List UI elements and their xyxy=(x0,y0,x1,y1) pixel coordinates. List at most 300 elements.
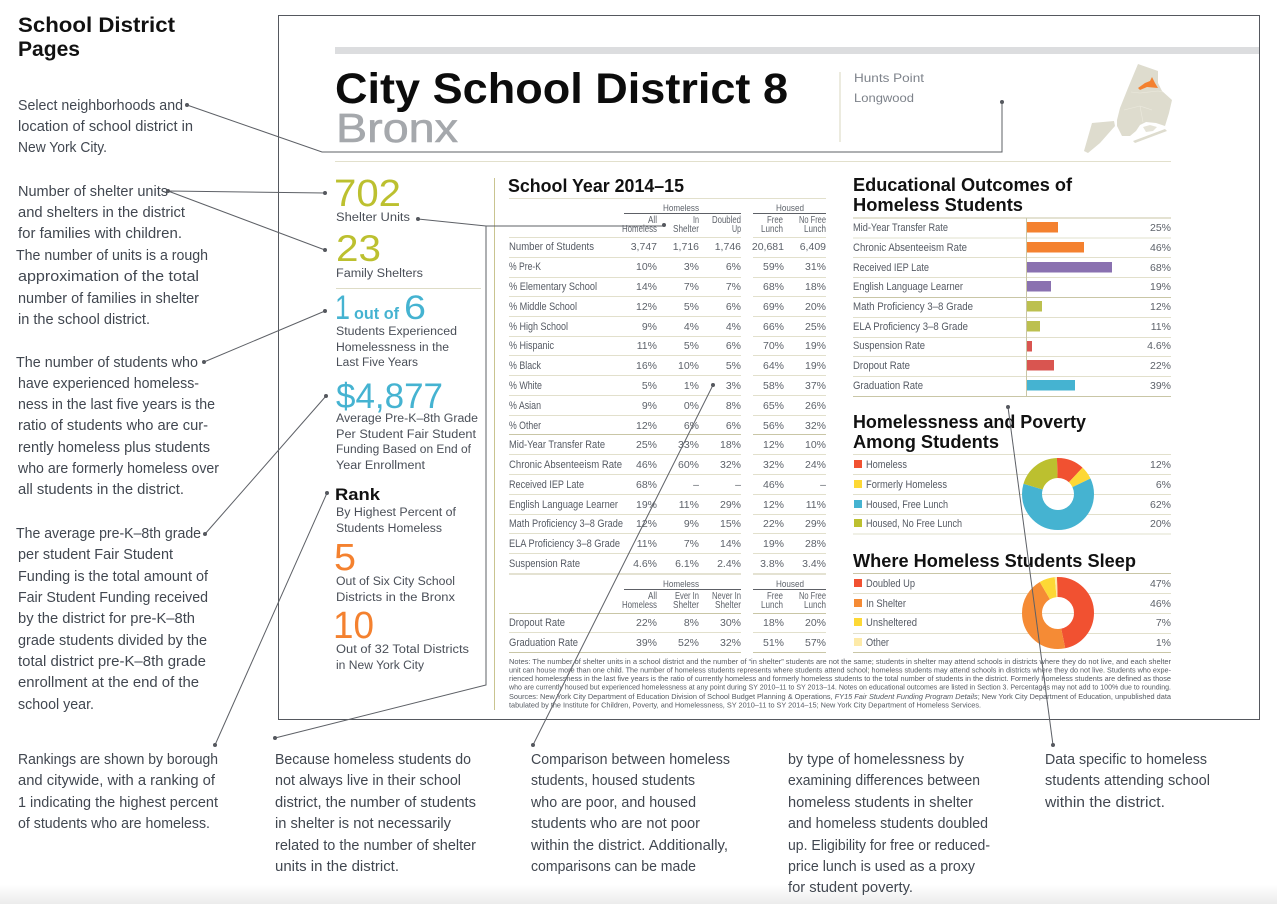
leader: one out of six xyxy=(202,309,327,364)
row: black: 5% xyxy=(726,360,741,372)
annotation: neighborhoods xyxy=(18,97,193,156)
chart: educational outcomes xyxy=(853,175,1171,396)
annotation: shelter units: The number of units is a rough xyxy=(16,247,208,264)
row: middle school: 69% xyxy=(763,301,784,313)
annotation: comparison xyxy=(530,751,730,875)
row: ela proficiency: 11% xyxy=(637,538,657,550)
row: math proficiency xyxy=(509,518,826,530)
bar: received iep late: Received IEP Late xyxy=(853,262,929,274)
row: graduation rate: 51% xyxy=(763,637,784,649)
annotation: neighborhoods: location of school district in xyxy=(18,118,193,135)
legend: in shelter: In Shelter xyxy=(866,598,906,610)
borough name: Bronx xyxy=(336,105,459,151)
legend: in shelter xyxy=(854,598,1171,610)
annotation: shelter units: Number of shelter units xyxy=(18,183,168,200)
row: received iep late: – xyxy=(735,479,741,491)
row: suspension rate: 2.4% xyxy=(717,558,741,570)
chart: where homeless students sleep xyxy=(853,551,1171,652)
row: other: 6% xyxy=(684,420,699,432)
row: graduation rate: 52% xyxy=(678,637,699,649)
notes and sources xyxy=(508,657,1172,710)
stat: funding per student: Per Student Fair Student xyxy=(336,429,477,441)
second column headers: Never In xyxy=(712,591,741,602)
stat: family shelters: Family Shelters xyxy=(336,268,423,280)
annotation: experienced homelessness: ratio of students who are cur- xyxy=(18,417,208,434)
row: pre-k: 6% xyxy=(726,261,741,273)
chart heading xyxy=(853,412,1086,452)
row: other: 32% xyxy=(805,420,826,432)
legend: doubled up: Doubled Up xyxy=(866,578,915,590)
annotation: type of homelessness: by type of homelessness by xyxy=(788,751,964,768)
row: math proficiency: Math Proficiency 3–8 Grade xyxy=(509,518,623,530)
column headers: Homeless xyxy=(622,224,657,235)
chart: homelessness and poverty xyxy=(853,412,1171,534)
row: elementary school xyxy=(509,281,826,293)
annotation: neighborhoods: Select neighborhoods and xyxy=(18,97,183,114)
annotation: experienced homelessness: who are formerly homeless over xyxy=(17,460,219,477)
row: suspension rate xyxy=(509,558,826,570)
annotation: fair student funding: total district pre-K–8th grade xyxy=(18,653,206,670)
row: chronic absenteeism xyxy=(509,459,826,471)
row: ela proficiency: ELA Proficiency 3–8 Grade xyxy=(509,538,620,550)
row: hispanic: 19% xyxy=(805,340,826,352)
chart heading: Where Homeless Students Sleep xyxy=(853,551,1136,571)
stat: shelter units xyxy=(334,173,410,224)
page heading: Pages xyxy=(18,38,80,61)
bar: english language learner: 19% xyxy=(1150,281,1171,293)
legend: unsheltered xyxy=(854,617,1171,629)
legend: housed no free lunch: 20% xyxy=(1150,518,1171,530)
row: elementary school: 14% xyxy=(636,281,657,293)
leader: rank xyxy=(213,491,329,747)
stat: one out of six: out of xyxy=(354,304,399,323)
annotation: experienced homelessness: all students in the district. xyxy=(18,481,184,498)
annotation: students in shelter: Because homeless students do xyxy=(275,751,471,768)
legend: in shelter: 46% xyxy=(1150,598,1171,610)
legend: housed free lunch: Housed, Free Lunch xyxy=(866,499,948,511)
annotation: fair student funding xyxy=(16,525,209,713)
row: hispanic: 70% xyxy=(763,340,784,352)
notes and sources: tabulated by the Institute for Children, Poverty, and Homelessness, SY 2010–11 to SY 2014–15; New York City Department of Homeless Services. xyxy=(509,700,981,710)
stat: funding per student xyxy=(336,377,478,472)
column headers xyxy=(622,203,826,235)
row: english language learner: 11% xyxy=(806,499,826,511)
row: mid-year transfer: 18% xyxy=(720,439,741,451)
row: high school: % High School xyxy=(509,321,568,333)
annotation: experienced homelessness: The number of students who xyxy=(16,354,198,371)
stat: family shelters: 23 xyxy=(336,228,381,269)
notes and sources: Notes: The number of shelter units in a school district and the number of “in shelter” students are not the same; students in shelter may attend schools in districts where they do not live, and each shelter xyxy=(509,657,1172,666)
second column headers: Ever In xyxy=(675,591,699,602)
row: pre-k: % Pre-K xyxy=(509,261,542,273)
row: hispanic: 6% xyxy=(726,340,741,352)
stat: one out of six: 6 xyxy=(404,289,426,327)
panel: sample district page xyxy=(278,16,1260,720)
row: high school: 4% xyxy=(684,321,699,333)
row: asian: 0% xyxy=(684,400,699,412)
row: white: 37% xyxy=(805,380,826,392)
row: suspension rate: 6.1% xyxy=(675,558,699,570)
leader: district data xyxy=(1006,405,1055,747)
annotation: rankings: 1 indicating the highest percent xyxy=(18,794,219,811)
annotation: type of homelessness: examining differences between xyxy=(788,772,980,789)
chart heading xyxy=(853,175,1073,215)
notes and sources: unit can house more than one child. The number of homeless students represents where students attend school; homeless students may attend schools in districts where they do not live. Students who expe- xyxy=(509,666,1172,674)
row: asian xyxy=(509,400,826,412)
rank: Out of 32 Total Districts xyxy=(336,644,469,656)
annotation: shelter units: and shelters in the district xyxy=(18,204,186,221)
column headers: Free xyxy=(767,215,783,226)
bar: graduation rate: 39% xyxy=(1150,380,1171,392)
row: received iep late: Received IEP Late xyxy=(509,479,584,491)
annotation: neighborhoods: New York City. xyxy=(18,139,107,156)
stat: funding per student: Funding Based on End of xyxy=(336,444,472,456)
row: pre-k: 3% xyxy=(684,261,699,273)
annotation: type of homelessness: for student poverty. xyxy=(788,879,913,896)
annotation: type of homelessness: homeless students in shelter xyxy=(788,794,973,811)
row: hispanic xyxy=(509,340,826,352)
page heading: School District xyxy=(18,14,175,37)
row: other: 12% xyxy=(636,420,657,432)
annotation: rankings: of students who are homeless. xyxy=(18,815,210,832)
legend: housed no free lunch xyxy=(854,518,1171,530)
row: mid-year transfer: Mid-Year Transfer Rate xyxy=(509,439,605,451)
row: white: 58% xyxy=(763,380,784,392)
bar: english language learner: English Language Learner xyxy=(853,281,963,293)
stat: one out of six: Homelessness in the xyxy=(336,342,449,354)
legend: doubled up xyxy=(854,578,1171,590)
annotation: students in shelter: in shelter is not necessarily xyxy=(275,815,451,832)
neighborhoods xyxy=(854,71,925,105)
annotation: type of homelessness: price lunch is used as a proxy xyxy=(788,858,975,875)
row: chronic absenteeism: 32% xyxy=(763,459,784,471)
row: number of students: 3,747 xyxy=(631,241,657,253)
stat: one out of six: Last Five Years xyxy=(336,357,418,369)
row: middle school: % Middle School xyxy=(509,301,577,313)
bar: ela proficiency xyxy=(853,321,1171,333)
chart heading: Among Students xyxy=(853,432,999,452)
map: New York City with district highlighted xyxy=(1084,64,1172,153)
row: asian: 8% xyxy=(726,400,741,412)
notes and sources: Sources: New York City Department of Education Division of School Budget Planning & Operations, FY15 Fair Student Funding Program Details; New York City Department of Education, unpublished data xyxy=(509,692,1172,701)
stat: funding per student: $4,877 xyxy=(336,377,443,416)
row: graduation rate: 57% xyxy=(805,637,826,649)
row: white: 1% xyxy=(684,380,699,392)
row: math proficiency: 9% xyxy=(684,518,699,530)
row: elementary school: % Elementary School xyxy=(509,281,597,293)
annotation: shelter units: for families with children. xyxy=(18,225,182,242)
row: number of students: Number of Students xyxy=(509,241,594,253)
row: pre-k: 31% xyxy=(805,261,826,273)
second column headers: Shelter xyxy=(673,600,700,611)
annotation: district-specific data: within the district. xyxy=(1044,794,1165,811)
notes and sources: rienced homelessness in the last five years is the ratio of currently homeless and formerly homeless students to the total number of students in the district. Formerly homeless students are defined as those xyxy=(509,674,1171,683)
column headers: Housed xyxy=(776,203,804,214)
row: received iep late: – xyxy=(820,479,826,491)
annotation: rankings: and citywide, with a ranking of xyxy=(18,772,216,789)
row: black xyxy=(509,360,826,372)
row: english language learner: English Language Learner xyxy=(509,499,618,511)
rank: 10 xyxy=(333,605,374,647)
annotation: rankings xyxy=(18,751,219,832)
row: mid-year transfer: 12% xyxy=(763,439,784,451)
row: math proficiency: 15% xyxy=(720,518,741,530)
rank: By Highest Percent of xyxy=(336,507,457,519)
leader: funding xyxy=(203,394,328,536)
annotation: comparison: Comparison between homeless xyxy=(531,751,730,768)
row: middle school: 12% xyxy=(636,301,657,313)
annotation: comparison: within the district. Additionally, xyxy=(530,837,728,854)
row: english language learner: 11% xyxy=(679,499,699,511)
row: dropout rate: 22% xyxy=(636,617,657,629)
bar: math proficiency: 12% xyxy=(1150,301,1171,313)
row: white: 5% xyxy=(642,380,657,392)
row: other xyxy=(509,420,826,432)
annotation: type of homelessness xyxy=(788,751,990,896)
column headers: Homeless xyxy=(663,203,699,214)
row: hispanic: 11% xyxy=(637,340,657,352)
bar: suspension rate: 4.6% xyxy=(1147,340,1171,352)
rank xyxy=(333,485,469,672)
annotation: fair student funding: enrollment at the end of the xyxy=(18,674,199,691)
legend: formerly homeless: 6% xyxy=(1156,479,1171,491)
bar: dropout rate: 22% xyxy=(1150,360,1171,372)
annotation: comparison: students who are not poor xyxy=(531,815,700,832)
neighborhoods: Longwood xyxy=(854,91,914,105)
stat: shelter units: Shelter Units xyxy=(336,212,410,224)
row: graduation rate: 32% xyxy=(720,637,741,649)
row: number of students: 20,681 xyxy=(752,241,784,253)
bar: graduation rate xyxy=(853,380,1171,392)
row: graduation rate: 39% xyxy=(636,637,657,649)
second column headers: Lunch xyxy=(761,600,783,611)
bar: received iep late xyxy=(853,262,1171,274)
bar: english language learner xyxy=(853,281,1171,293)
annotation: shelter units: approximation of the total xyxy=(18,268,199,285)
annotation: fair student funding: Funding is the total amount of xyxy=(18,568,209,585)
legend: other: Other xyxy=(866,637,889,649)
second column headers: Shelter xyxy=(715,600,742,611)
annotation: comparison: comparisons can be made xyxy=(531,858,696,875)
row: black: 10% xyxy=(678,360,699,372)
row: asian: 65% xyxy=(763,400,784,412)
column headers: Up xyxy=(732,224,741,235)
bar: suspension rate xyxy=(853,340,1171,352)
row: chronic absenteeism: 46% xyxy=(636,459,657,471)
legend: housed no free lunch: Housed, No Free Lunch xyxy=(866,518,962,530)
annotation: fair student funding: Fair Student Funding received xyxy=(18,589,208,606)
legend: unsheltered: 7% xyxy=(1156,617,1171,629)
second column headers: Homeless xyxy=(622,600,657,611)
legend: homeless: Homeless xyxy=(866,459,907,471)
row: ela proficiency xyxy=(509,538,826,550)
row: pre-k xyxy=(509,261,826,273)
bar: ela proficiency: 11% xyxy=(1151,321,1171,333)
column headers: Lunch xyxy=(761,224,783,235)
annotation: students in shelter: district, the number of students xyxy=(275,794,476,811)
row: chronic absenteeism: 60% xyxy=(678,459,699,471)
bar: chronic absenteeism xyxy=(853,242,1171,254)
legend: other xyxy=(854,637,1171,649)
page heading xyxy=(18,14,175,61)
row: received iep late xyxy=(509,479,826,491)
legend: homeless xyxy=(854,459,1171,471)
row: received iep late: – xyxy=(693,479,699,491)
annotation: students in shelter: units in the district. xyxy=(275,858,399,875)
stat: one out of six xyxy=(335,289,457,369)
row: asian: 9% xyxy=(642,400,657,412)
second column headers: Homeless xyxy=(663,579,699,590)
row: hispanic: 5% xyxy=(684,340,699,352)
row: dropout rate: 20% xyxy=(805,617,826,629)
stat: family shelters xyxy=(336,228,423,280)
annotation: comparison: students, housed students xyxy=(531,772,695,789)
row: elementary school: 7% xyxy=(684,281,699,293)
row: middle school: 20% xyxy=(805,301,826,313)
legend: formerly homeless: Formerly Homeless xyxy=(866,479,947,491)
row: chronic absenteeism: Chronic Absenteeism Rate xyxy=(509,459,622,471)
district title: City School District 8 xyxy=(335,65,788,113)
row: middle school: 6% xyxy=(726,301,741,313)
row: black: 64% xyxy=(763,360,784,372)
row: mid-year transfer: 25% xyxy=(636,439,657,451)
column headers: No Free xyxy=(799,215,826,226)
annotation: students in shelter: related to the number of shelter xyxy=(275,837,476,854)
bar: mid-year transfer: 25% xyxy=(1150,222,1171,234)
stat: one out of six: 1 xyxy=(335,289,350,327)
stat: funding per student: Average Pre-K–8th Grade xyxy=(336,413,478,425)
leader: comparison xyxy=(531,383,715,747)
column headers: All xyxy=(648,215,657,226)
row: chronic absenteeism: 32% xyxy=(720,459,741,471)
legend: unsheltered: Unsheltered xyxy=(866,617,917,629)
row: black: 16% xyxy=(636,360,657,372)
row: graduation rate: Graduation Rate xyxy=(509,637,578,649)
legend: homeless: 12% xyxy=(1150,459,1171,471)
annotation: rankings: Rankings are shown by borough xyxy=(18,751,218,768)
legend: housed free lunch xyxy=(854,499,1171,511)
table: school year 2014-15 xyxy=(508,176,826,652)
row: math proficiency: 22% xyxy=(763,518,784,530)
row: ela proficiency: 19% xyxy=(763,538,784,550)
table heading: School Year 2014–15 xyxy=(508,176,684,196)
row: math proficiency: 29% xyxy=(805,518,826,530)
annotation: type of homelessness: up. Eligibility for free or reduced- xyxy=(788,837,990,854)
row: dropout rate: 18% xyxy=(763,617,784,629)
annotation: district-specific data: Data specific to homeless xyxy=(1045,751,1207,768)
row: mid-year transfer xyxy=(509,439,826,451)
row: english language learner: 12% xyxy=(763,499,784,511)
row: high school: 66% xyxy=(763,321,784,333)
second column headers: Lunch xyxy=(804,600,826,611)
row: high school: 25% xyxy=(805,321,826,333)
row: graduation rate xyxy=(509,637,826,649)
row: chronic absenteeism: 24% xyxy=(805,459,826,471)
row: elementary school: 7% xyxy=(726,281,741,293)
bar: mid-year transfer xyxy=(853,222,1171,234)
bar: math proficiency xyxy=(853,301,1171,313)
column headers: In xyxy=(693,215,699,226)
row: received iep late: 68% xyxy=(636,479,657,491)
second column headers: Free xyxy=(767,591,783,602)
bar: mid-year transfer: Mid-Year Transfer Rate xyxy=(853,222,948,234)
chart heading: Educational Outcomes of xyxy=(853,175,1073,195)
rank: Rank xyxy=(335,485,381,504)
row: pre-k: 59% xyxy=(763,261,784,273)
row: white: 3% xyxy=(726,380,741,392)
column headers: Doubled xyxy=(712,215,741,226)
annotation: district-specific data xyxy=(1044,751,1210,811)
rank: Districts in the Bronx xyxy=(336,592,455,604)
annotation: fair student funding: The average pre-K–8th grade xyxy=(16,525,201,542)
row: other: 56% xyxy=(763,420,784,432)
row: ela proficiency: 14% xyxy=(720,538,741,550)
row: suspension rate: 3.8% xyxy=(760,558,784,570)
donut: poverty shares xyxy=(1032,468,1084,520)
row: suspension rate: Suspension Rate xyxy=(509,558,580,570)
annotation: shelter units: number of families in shelter xyxy=(18,290,199,307)
row: white: % White xyxy=(509,380,542,392)
row: high school xyxy=(509,321,826,333)
row: high school: 9% xyxy=(642,321,657,333)
annotation: fair student funding: per student Fair Student xyxy=(18,546,174,563)
column headers: Shelter xyxy=(673,224,700,235)
leader: shelter units to in shelter xyxy=(273,217,666,740)
annotation: fair student funding: school year. xyxy=(18,696,94,713)
row: math proficiency: 12% xyxy=(636,518,657,530)
annotation: type of homelessness: and homeless students doubled xyxy=(788,815,988,832)
row: ela proficiency: 28% xyxy=(805,538,826,550)
row: elementary school: 18% xyxy=(805,281,826,293)
annotation: experienced homelessness: rently homeless plus students xyxy=(18,439,210,456)
annotation: shelter units xyxy=(16,183,208,328)
row: suspension rate: 3.4% xyxy=(802,558,826,570)
chart heading: Homelessness and Poverty xyxy=(853,412,1086,432)
column headers: Lunch xyxy=(804,224,826,235)
row: number of students: 1,746 xyxy=(715,241,741,253)
bar: received iep late: 68% xyxy=(1150,262,1171,274)
annotation: students in shelter xyxy=(275,751,476,875)
leader: neighborhoods to header xyxy=(185,100,1004,152)
row: dropout rate: 30% xyxy=(720,617,741,629)
annotation: students in shelter: not always live in their school xyxy=(275,772,461,789)
annotation: experienced homelessness: have experienced homeless- xyxy=(18,375,199,392)
row: number of students xyxy=(509,241,826,253)
row: pre-k: 10% xyxy=(636,261,657,273)
row: hispanic: % Hispanic xyxy=(509,340,554,352)
row: number of students: 6,409 xyxy=(800,241,826,253)
second column headers: No Free xyxy=(799,591,826,602)
bar: dropout rate: Dropout Rate xyxy=(853,360,910,372)
row: number of students: 1,716 xyxy=(673,241,699,253)
rank: 5 xyxy=(334,537,356,579)
row: middle school xyxy=(509,301,826,313)
second column headers: All xyxy=(648,591,657,602)
bar: ela proficiency: ELA Proficiency 3–8 Grade xyxy=(853,321,968,333)
row: mid-year transfer: 10% xyxy=(805,439,826,451)
bar: chronic absenteeism: Chronic Absenteeism Rate xyxy=(853,242,967,254)
row: mid-year transfer: 33% xyxy=(678,439,699,451)
legend: other: 1% xyxy=(1156,637,1171,649)
stat: shelter units: 702 xyxy=(334,173,401,215)
row: asian: 26% xyxy=(805,400,826,412)
row: black: 19% xyxy=(805,360,826,372)
stat: one out of six: Students Experienced xyxy=(336,326,457,338)
row: english language learner xyxy=(509,499,826,511)
row: black: % Black xyxy=(509,360,541,372)
donut: sleeping arrangements xyxy=(1032,587,1084,639)
bar: suspension rate: Suspension Rate xyxy=(853,340,925,352)
